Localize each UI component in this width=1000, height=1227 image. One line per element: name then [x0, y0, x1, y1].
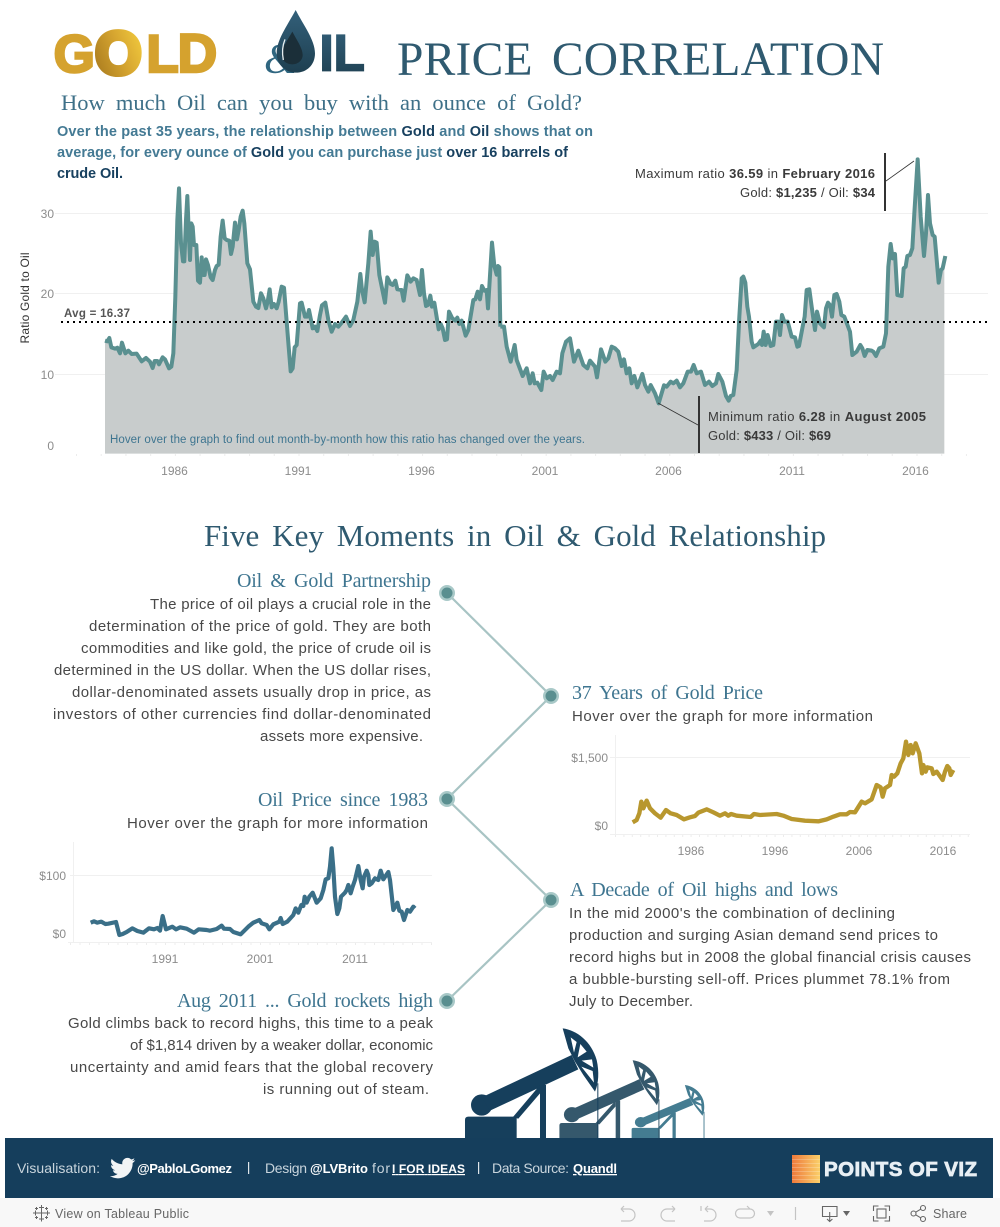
moment: Oil & Gold Partnership: determined in the US dollar. When the US dollar rises, [54, 662, 431, 679]
credits: Visualisation: [17, 1160, 100, 1176]
logo: GOLD [54, 20, 217, 87]
ratio area fill [105, 159, 944, 454]
credits: @PabloLGomez [137, 1161, 232, 1176]
icon: tableau logo [33, 1205, 50, 1222]
moment: Oil & Gold Partnership [53, 570, 431, 745]
moment: Aug 2011 Gold rockets high: uncertainty and amid fears that the global recovery [70, 1059, 434, 1076]
y axis grid lines and labels [18, 207, 988, 453]
moment: Aug 2011 Gold rockets high [68, 990, 434, 1098]
subtitle: How much Oil can you buy with an ounce of Gold? [61, 90, 582, 115]
line chart: gold price [571, 735, 970, 858]
credits [17, 1158, 617, 1178]
logo: Oil with drop [264, 10, 365, 83]
moment: 37 Years of Gold Price [572, 682, 873, 725]
logo: GOLD: O [95, 20, 142, 87]
icons: undo redo revert refresh [621, 1206, 796, 1221]
moment: A Decade of Oil highs and lows [569, 879, 971, 1010]
pumpjack large [465, 1028, 598, 1139]
moment: Oil & Gold Partnership: dollar-denominated assets usually drop in price, as [72, 684, 431, 701]
line chart: oil price: 2011 [342, 952, 368, 966]
ratio line [105, 159, 945, 403]
moment: A Decade of Oil highs and lows: production and surging Asian demand send prices to [569, 927, 938, 944]
x axis years: 2016 [902, 464, 929, 478]
x axis years: 2001 [532, 464, 559, 478]
logo: Oil with drop: & [264, 37, 297, 83]
moment: A Decade of Oil highs and lows: July to December. [569, 993, 693, 1010]
line chart: oil price: $100 [39, 869, 66, 883]
logo: points of viz: POINTS OF VIZ [824, 1158, 977, 1181]
credits: I FOR IDEAS [392, 1162, 465, 1176]
moment: 37 Years of Gold Price: Hover over the graph for more information [572, 708, 873, 725]
moment: Oil & Gold Partnership: commodities and like gold, the price of crude oil is [81, 640, 431, 657]
average line: Avg = 16.37 [64, 308, 130, 320]
callout: minimum ratio: Minimum ratio 6.28 in August 2005 [708, 409, 926, 424]
logo: Oil with drop: IL [320, 24, 365, 82]
title: PRICE CORRELATION [397, 34, 884, 86]
moment: A Decade of Oil highs and lows: A Decade of Oil highs and lows [570, 879, 838, 901]
callout: maximum ratio: Gold: $1,235 / Oil: $34 [740, 185, 876, 200]
view on tableau public: View on Tableau Public [55, 1207, 189, 1221]
moment: Aug 2011 Gold rockets high: of $1,814 driven by a weaker dollar, economic [130, 1037, 434, 1054]
callout: maximum ratio [635, 153, 914, 211]
credits: @LVBrito [310, 1161, 368, 1176]
moment: Oil & Gold Partnership: determination of the price of gold. They are both [89, 618, 431, 635]
line chart: oil price: 1991 [152, 952, 179, 966]
line chart: oil price: 2001 [247, 952, 274, 966]
credits: Design [265, 1160, 307, 1176]
line chart: oil price: $0 [53, 927, 66, 941]
moment: Oil & Gold Partnership: The price of oil plays a crucial role in the [150, 596, 431, 613]
x axis years: 1996 [408, 464, 435, 478]
moment: Oil & Gold Partnership: Oil & Gold Partnership [237, 570, 431, 592]
line chart: gold price: 1986 [678, 844, 705, 858]
moment: Aug 2011 Gold rockets high: Aug 2011 ... Gold rockets high [177, 990, 433, 1012]
intro text [57, 124, 593, 182]
moment: 37 Years of Gold Price: 37 Years of Gold Price [572, 682, 763, 704]
intro text: Over the past 35 years, the relationship between Gold and Oil shows that on [57, 124, 593, 140]
y axis grid lines and labels: 10 [41, 368, 54, 382]
logo: points of viz [792, 1155, 977, 1183]
logo: GOLD: G [54, 25, 95, 84]
x axis years [76, 455, 985, 478]
y axis grid lines and labels: 20 [41, 287, 54, 301]
icon: share [911, 1206, 926, 1222]
pumpjack medium [559, 1060, 659, 1139]
moment: Aug 2011 Gold rockets high: Gold climbs back to record highs, this time to a peak [68, 1015, 434, 1032]
moment: Oil & Gold Partnership: assets more expensive. [260, 728, 423, 745]
y axis grid lines and labels: Ratio Gold to Oil [18, 252, 32, 344]
logo: GOLD: L [146, 25, 179, 84]
x axis years: 1991 [285, 464, 312, 478]
area chart: gold to oil ratio [18, 153, 988, 478]
section heading: Five Key Moments in Oil & Gold Relationship [204, 518, 826, 553]
intro text: average, for every ounce of Gold you can purchase just over 16 barrels of [57, 145, 568, 161]
footer bar [5, 1138, 993, 1198]
line chart: oil price [39, 842, 432, 966]
intro text: crude Oil. [57, 166, 123, 182]
line chart: gold price: $1,500 [571, 751, 608, 765]
moment: Oil Price since 1983: Hover over the graph for more information [127, 815, 428, 832]
moment: Oil & Gold Partnership: investors of other currencies find dollar-denominated [53, 706, 431, 723]
callout: minimum ratio: Gold: $433 / Oil: $69 [708, 428, 831, 443]
share label: Share [933, 1207, 967, 1221]
moment: Oil Price since 1983: Oil Price since 1983 [258, 789, 428, 811]
callout: minimum ratio [658, 396, 926, 453]
moment: Aug 2011 Gold rockets high: is running out of steam. [263, 1081, 429, 1098]
line chart: gold price: 2016 [930, 844, 957, 858]
moment: A Decade of Oil highs and lows: In the mid 2000's the combination of declining [569, 905, 895, 922]
moment: A Decade of Oil highs and lows: record highs but in 2008 the global financial crisis causes [569, 949, 971, 966]
x axis years: 2011 [779, 464, 805, 478]
illustration: oil pumpjacks [465, 1028, 704, 1139]
x axis years: 2006 [655, 464, 682, 478]
credits: for [372, 1160, 390, 1176]
moment: A Decade of Oil highs and lows: a bubble-bursting sell-off. Prices plummet 78.1% from [569, 971, 950, 988]
icon: download [822, 1206, 850, 1222]
callout: maximum ratio: Maximum ratio 36.59 in February 2016 [635, 166, 875, 181]
credits: Data Source: [492, 1160, 569, 1176]
timeline connector [439, 585, 559, 1009]
pumpjack small [632, 1085, 704, 1139]
credits: Quandl [573, 1161, 617, 1176]
toolbar [0, 1138, 1000, 1227]
line chart: gold price: $0 [595, 819, 608, 833]
line chart: gold price: 2006 [846, 844, 873, 858]
y axis grid lines and labels: 0 [47, 439, 54, 453]
hover note: Hover over the graph to find out month-by-month how this ratio has changed over the years. [110, 434, 585, 446]
logo: GOLD: D [178, 22, 217, 84]
y axis grid lines and labels: 30 [41, 207, 54, 221]
moment: Oil Price since 1983 [127, 789, 428, 832]
line chart: gold price: 1996 [762, 844, 789, 858]
icon: fullscreen [874, 1206, 890, 1221]
x axis years: 1986 [161, 464, 188, 478]
icon: twitter bird [110, 1158, 135, 1178]
